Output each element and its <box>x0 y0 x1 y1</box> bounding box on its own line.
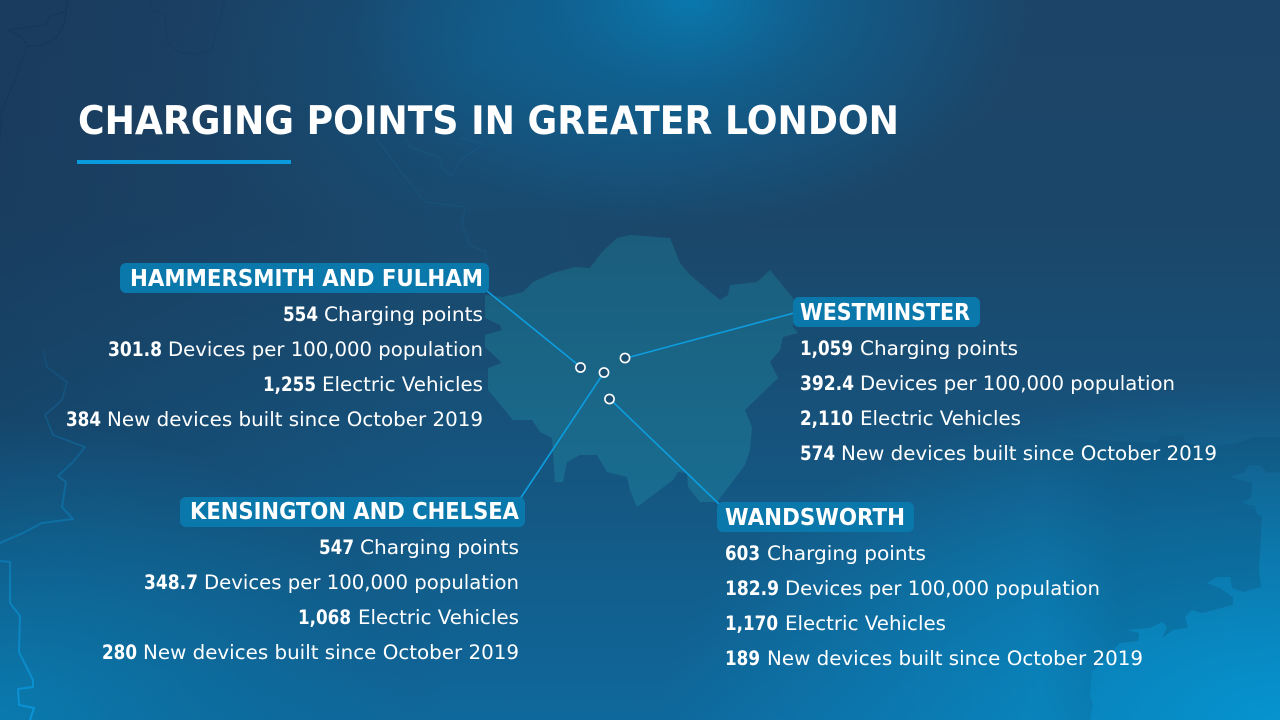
heading pill: Hammersmith and Fulham: HAMMERSMITH AND FULHAM <box>130 266 483 292</box>
marker: Hammersmith and Fulham <box>576 363 585 372</box>
background: coastline land mass <box>1040 420 1280 720</box>
stat: electric vehicles: 2,110 <box>800 407 853 430</box>
marker: Westminster <box>620 353 630 363</box>
stat: devices per 100,000: 348.7 <box>144 571 198 594</box>
title underline <box>77 160 291 164</box>
stat: devices per 100,000: Devices per 100,000 population <box>785 577 1100 600</box>
stat: electric vehicles: 1,255 <box>263 373 316 396</box>
connector line: Hammersmith and Fulham <box>487 291 577 364</box>
stat: charging points: Charging points <box>360 536 519 559</box>
stat: charging points: Charging points <box>324 303 483 326</box>
heading pill: Wandsworth: WANDSWORTH <box>725 505 905 531</box>
stat: devices per 100,000: Devices per 100,000 population <box>860 372 1175 395</box>
stat: electric vehicles: 1,068 <box>298 606 351 629</box>
stat: charging points: 1,059 <box>800 337 853 360</box>
stat: charging points: Charging points <box>767 542 926 565</box>
panel: Westminster <box>793 297 1217 465</box>
stat: electric vehicles: Electric Vehicles <box>322 373 483 396</box>
stat: devices per 100,000: Devices per 100,000 population <box>168 338 483 361</box>
stat: new devices: 574 <box>800 442 835 465</box>
stat: new devices: New devices built since October 2019 <box>841 442 1217 465</box>
stat: charging points: 547 <box>319 536 354 559</box>
stat: electric vehicles: 1,170 <box>725 612 778 635</box>
stat: devices per 100,000: Devices per 100,000 population <box>204 571 519 594</box>
stat: devices per 100,000: 392.4 <box>800 372 854 395</box>
map of Greater London <box>485 235 798 507</box>
marker: Kensington and Chelsea <box>599 368 609 377</box>
stat: electric vehicles: Electric Vehicles <box>860 407 1021 430</box>
stat: new devices: 189 <box>725 647 760 670</box>
stat: charging points: 603 <box>725 542 760 565</box>
heading pill: Kensington and Chelsea: KENSINGTON AND CHELSEA <box>190 499 519 525</box>
panel: Kensington and Chelsea <box>102 497 525 664</box>
stat: new devices: New devices built since October 2019 <box>767 647 1143 670</box>
stat: new devices: 384 <box>66 408 101 431</box>
connector line: Westminster <box>630 313 794 357</box>
panel: Hammersmith and Fulham <box>66 263 489 431</box>
stat: devices per 100,000: 182.9 <box>725 577 779 600</box>
stat: new devices: 280 <box>102 641 137 664</box>
panel: Wandsworth <box>717 502 1143 670</box>
stat: devices per 100,000: 301.8 <box>108 338 162 361</box>
background: faint county boundary lines <box>0 0 488 720</box>
heading pill: Westminster: WESTMINSTER <box>800 300 970 326</box>
marker: Wandsworth <box>605 394 614 404</box>
stat: electric vehicles: Electric Vehicles <box>358 606 519 629</box>
title: CHARGING POINTS IN GREATER LONDON <box>78 99 899 144</box>
stat: electric vehicles: Electric Vehicles <box>785 612 946 635</box>
stat: charging points: Charging points <box>860 337 1018 360</box>
stat: new devices: New devices built since October 2019 <box>143 641 519 664</box>
stat: charging points: 554 <box>283 303 318 326</box>
connector line: Wandsworth <box>613 402 719 504</box>
connector line: Kensington and Chelsea <box>520 377 601 499</box>
stat: new devices: New devices built since October 2019 <box>107 408 483 431</box>
